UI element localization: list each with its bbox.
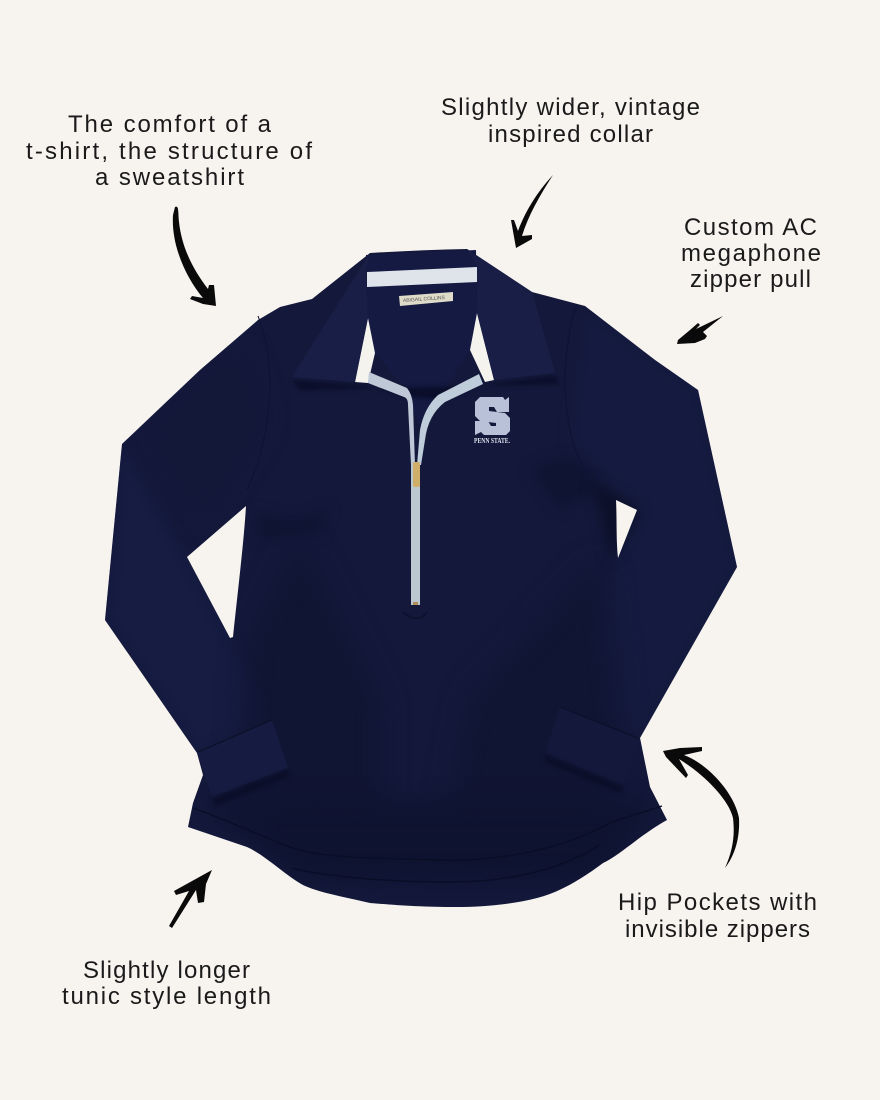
armhole seams	[247, 305, 585, 490]
arrow: comfort	[173, 207, 216, 306]
zipper pull	[413, 462, 420, 487]
annotation: comfort	[26, 111, 312, 191]
shirt silhouette	[105, 249, 737, 907]
annotation: hip pockets	[618, 889, 817, 943]
left zipper tape	[368, 372, 415, 465]
right collar flap	[467, 249, 555, 380]
arrow: zipper pull	[677, 316, 723, 344]
annotation: zipper pull: megaphone	[681, 240, 821, 267]
left cuff	[197, 720, 288, 797]
annotation: zipper pull: Custom AC	[684, 214, 817, 241]
right white collar strip	[470, 313, 494, 382]
annotation: zipper pull	[681, 214, 821, 293]
annotation: hip pockets: invisible zippers	[625, 916, 810, 943]
collar shadow	[292, 376, 560, 400]
annotation: hip pockets: Hip Pockets with	[618, 889, 817, 916]
left cuff seam	[198, 720, 272, 752]
arrow: hip pockets	[663, 747, 739, 868]
collar brand label	[399, 292, 453, 306]
right armpit gap	[616, 500, 637, 558]
hem stitching	[193, 806, 662, 882]
left collar flap	[292, 253, 370, 382]
annotation: length	[62, 957, 271, 1010]
annotation: length: tunic style length	[62, 983, 271, 1010]
S logo: PENN STATE.	[474, 436, 510, 445]
neck interior	[366, 250, 477, 425]
fabric shading	[105, 310, 737, 880]
annotation: comfort: a sweatshirt	[95, 164, 244, 191]
annotation: collar: Slightly wider, vintage	[441, 94, 700, 121]
collar white band	[367, 267, 477, 287]
annotation: length: Slightly longer	[83, 957, 250, 984]
infographic canvas	[26, 98, 820, 1009]
annotation: comfort: The comfort of a	[68, 111, 272, 138]
annotation: collar: inspired collar	[488, 121, 653, 148]
annotation: zipper pull: zipper pull	[690, 266, 811, 293]
left armpit gap	[187, 506, 246, 638]
placket fold	[403, 612, 427, 618]
collar brand label: ABIGAIL COLLINS	[403, 295, 446, 304]
zipper base	[413, 602, 418, 605]
annotation: collar	[441, 94, 700, 148]
arrow: length	[169, 870, 212, 928]
right cuff	[545, 707, 640, 785]
zipper	[411, 462, 420, 605]
S logo	[474, 397, 510, 445]
annotation: comfort: t-shirt, the structure of	[26, 138, 312, 165]
left white collar strip	[355, 318, 375, 383]
shirt	[105, 249, 737, 907]
right zipper tape	[417, 374, 483, 465]
arrow: collar	[511, 175, 553, 248]
right cuff seam	[560, 707, 638, 738]
cuff shadows	[212, 755, 623, 806]
